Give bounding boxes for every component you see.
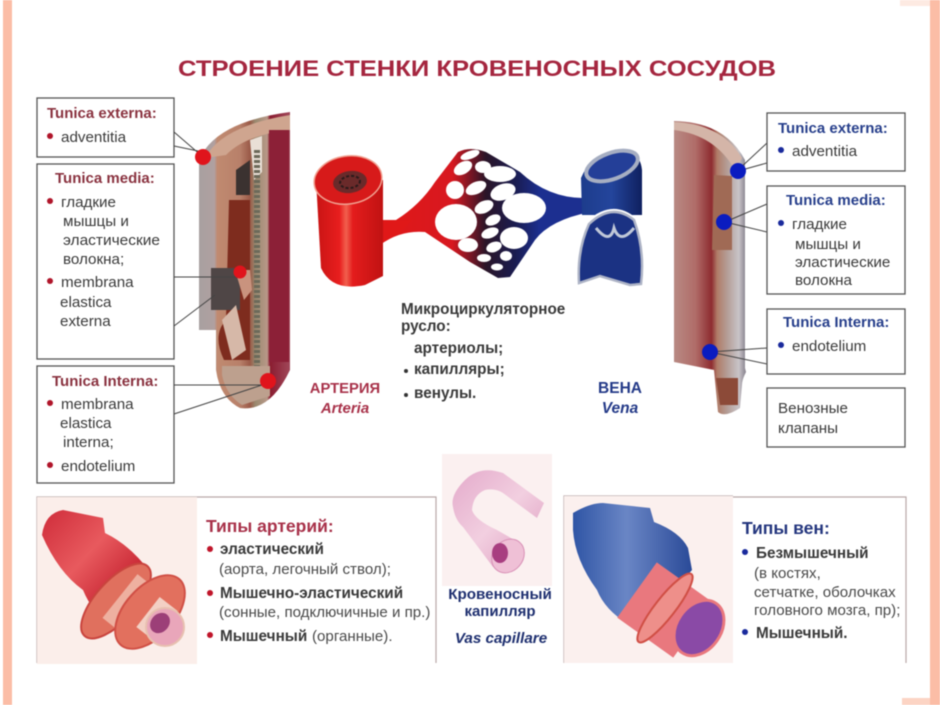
artery label: Arteria	[320, 400, 369, 417]
panel: tunica media (artery): elastica	[60, 294, 112, 311]
panel: tunica media (artery): гладкие	[61, 194, 116, 211]
panel: tunica media (artery): membrana	[61, 274, 134, 291]
panel: tunica interna (artery)	[37, 366, 174, 483]
panel: tunica media (artery)	[37, 164, 174, 359]
vein types text: Безмышечный	[756, 545, 869, 562]
vein types text: (в костях,	[754, 565, 821, 582]
artery types text: (сонные, подключичные и пр.)	[219, 604, 430, 621]
panel: tunica media (vein): волокна	[795, 272, 853, 289]
vein types text: Мышечный.	[756, 625, 848, 642]
capillary caption: Кровеносный	[448, 586, 552, 603]
icon: capillary tube	[452, 470, 544, 579]
panel: tunica media (artery): эластические	[63, 232, 160, 249]
panel: artery wall illustration	[199, 112, 290, 408]
artery types text: Мышечно-эластический	[220, 585, 403, 602]
panel: tunica media (vein)	[767, 186, 905, 294]
vein types text: сетчатке, оболочках	[754, 584, 896, 601]
vein label: Vena	[602, 400, 639, 417]
microcirculation text: капилляры;	[414, 361, 505, 378]
artery label	[310, 381, 380, 417]
panel: tunica interna (artery): Tunica Interna:	[52, 373, 158, 390]
bottom right corner marks	[902, 698, 930, 705]
panel: tunica interna (vein)	[767, 309, 905, 374]
artery types text: эластический	[220, 541, 324, 558]
capillary network	[380, 148, 590, 278]
artery label: АРТЕРИЯ	[310, 381, 380, 397]
artery types text: Типы артерий:	[206, 516, 334, 536]
microcirculation text: венулы.	[414, 385, 476, 402]
artery vessel	[311, 152, 412, 287]
artery types text: (аорта, легочный ствол);	[219, 561, 391, 578]
vein label: ВЕНА	[598, 380, 642, 397]
microcirculation illustration	[311, 145, 645, 287]
capillary caption	[448, 586, 552, 647]
panel: vein types	[564, 496, 906, 665]
panel: tunica media (vein): Tunica media:	[786, 192, 886, 209]
panel: tunica interna (artery): elastica	[60, 415, 112, 432]
left border strip	[3, 0, 12, 705]
panel: capillary	[442, 454, 552, 647]
vein types frame	[564, 496, 906, 663]
top right corner marks	[900, 0, 930, 6]
panel: tunica media (artery): Tunica media:	[55, 170, 155, 187]
artery leader lines and markers	[174, 132, 276, 414]
panel: tunica interna (artery): endotelium	[61, 458, 135, 475]
panel: tunica externa (vein): Tunica externa:	[778, 120, 888, 137]
right border strip	[930, 0, 940, 705]
panel: tunica media (vein): мышцы и	[795, 236, 861, 253]
vein types text: Типы вен:	[742, 518, 830, 538]
vein leader lines and markers	[702, 143, 767, 364]
icon: vein cross-section	[573, 503, 734, 665]
microcirculation text: Микроциркуляторное	[401, 301, 565, 318]
capillary caption: капилляр	[464, 603, 536, 620]
panel: tunica media (vein): эластические	[795, 254, 890, 271]
panel: vein wall illustration	[674, 121, 746, 414]
panel: tunica externa (artery): Tunica externa:	[47, 105, 157, 122]
capillary caption: Vas capillare	[455, 630, 548, 647]
panel: tunica externa (artery): adventitia	[61, 129, 127, 146]
vein label	[598, 380, 642, 417]
vein types text: головного мозга, пр);	[754, 602, 900, 619]
artery types frame	[37, 497, 436, 663]
panel: tunica media (vein): гладкие	[792, 216, 847, 233]
panel: tunica externa (vein)	[767, 113, 905, 171]
panel: artery types	[37, 497, 436, 664]
artery illustration background	[37, 497, 197, 664]
microcirculation text: русло:	[401, 318, 451, 335]
panel: tunica interna (vein): Tunica Interna:	[783, 314, 889, 331]
panel: tunica interna (artery): interna;	[63, 434, 114, 451]
vein types text	[742, 518, 900, 642]
panel: tunica externa (vein): adventitia	[792, 143, 858, 160]
panel: tunica media (artery): мышцы и	[63, 213, 129, 230]
panel: venous valves: клапаны	[778, 420, 838, 437]
microcirculation text	[401, 301, 565, 402]
vein vessels	[576, 145, 645, 287]
artery types text	[206, 516, 430, 645]
panel: tunica media (artery): волокна;	[63, 251, 124, 268]
vein illustration background	[564, 496, 733, 663]
panel: tunica interna (vein): endotelium	[792, 338, 866, 355]
microcirculation text: артериолы;	[414, 340, 503, 357]
panel: venous valves	[767, 388, 905, 447]
icon: artery cross-section	[42, 510, 198, 661]
panel: tunica interna (artery): membrana	[61, 396, 134, 413]
panel: tunica externa (artery)	[37, 98, 174, 157]
panel: venous valves: Венозные	[778, 400, 848, 417]
artery types text: (органные).	[312, 628, 393, 645]
title: СТРОЕНИЕ СТЕНКИ КРОВЕНОСНЫХ СОСУДОВ	[178, 56, 776, 81]
panel: tunica media (artery): externa	[60, 313, 111, 330]
artery types text: Мышечный	[220, 628, 307, 645]
